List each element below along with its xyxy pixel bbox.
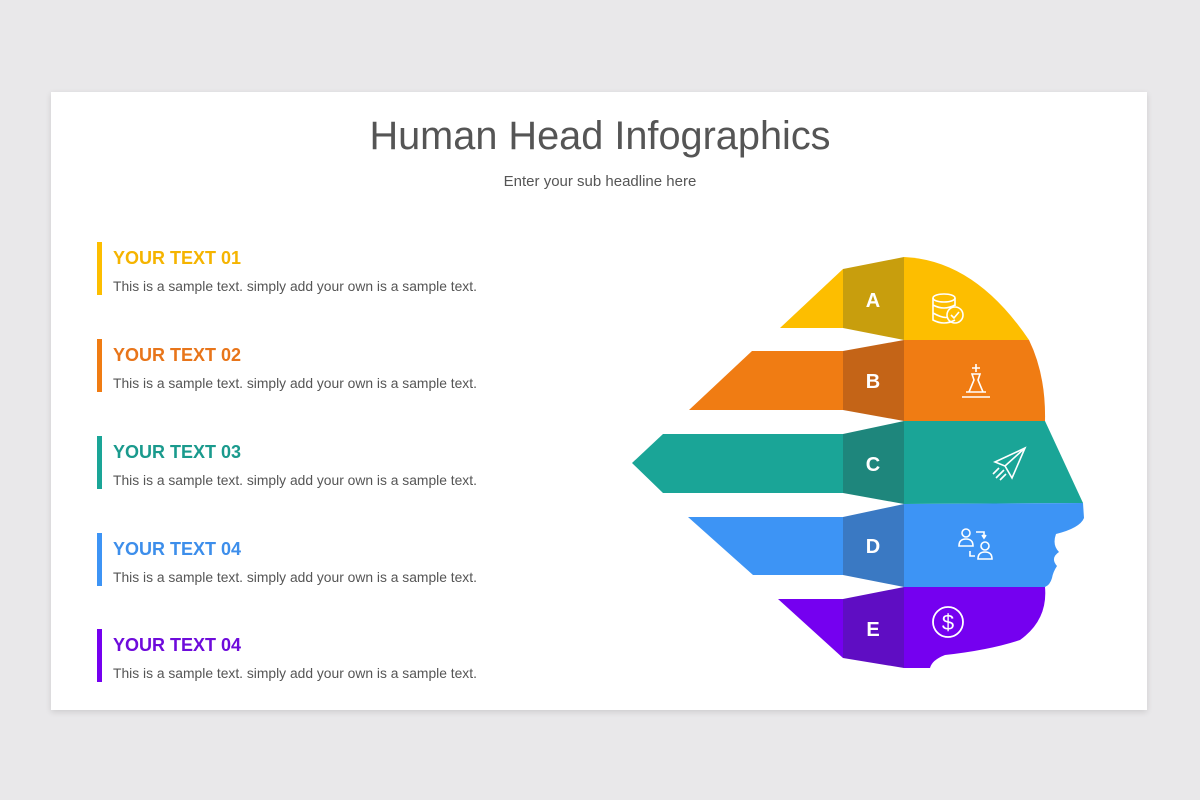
band D <box>688 503 1084 587</box>
text block 03: YOUR TEXT 03 <box>113 442 241 462</box>
text block 05: YOUR TEXT 04 <box>113 635 241 655</box>
icon: database check <box>933 294 963 323</box>
title: Human Head Infographics <box>369 114 831 158</box>
text block 01: YOUR TEXT 01 <box>113 248 241 268</box>
text block 05: This is a sample text. simply add your own is a sample text. <box>113 665 477 681</box>
text block 03 <box>97 436 477 489</box>
text block 04: This is a sample text. simply add your own is a sample text. <box>113 569 477 585</box>
text block 02 <box>97 339 477 392</box>
text block 05 <box>97 629 477 682</box>
band E: E <box>866 619 880 641</box>
text block 04: YOUR TEXT 04 <box>113 539 241 559</box>
icon: paper plane <box>993 448 1025 480</box>
band A <box>780 257 1029 340</box>
band D: D <box>866 536 880 558</box>
icon: people exchange <box>959 529 992 559</box>
subtitle: Enter your sub headline here <box>504 173 696 190</box>
text block 01: This is a sample text. simply add your own is a sample text. <box>113 278 477 294</box>
band C <box>632 421 1083 504</box>
icon: dollar coin <box>933 607 963 637</box>
icon: chess king <box>962 364 990 397</box>
panel: card <box>51 92 1147 710</box>
icon: dollar coin: $ <box>942 610 954 635</box>
band C: C <box>866 454 880 476</box>
text block 04 <box>97 533 477 586</box>
text block 02: This is a sample text. simply add your own is a sample text. <box>113 375 477 391</box>
text block 03: This is a sample text. simply add your own is a sample text. <box>113 472 477 488</box>
band B <box>689 340 1045 421</box>
band E <box>778 587 1045 668</box>
band B: B <box>866 371 880 393</box>
text block 01 <box>97 242 477 295</box>
text block 02: YOUR TEXT 02 <box>113 345 241 365</box>
band A: A <box>866 290 880 312</box>
